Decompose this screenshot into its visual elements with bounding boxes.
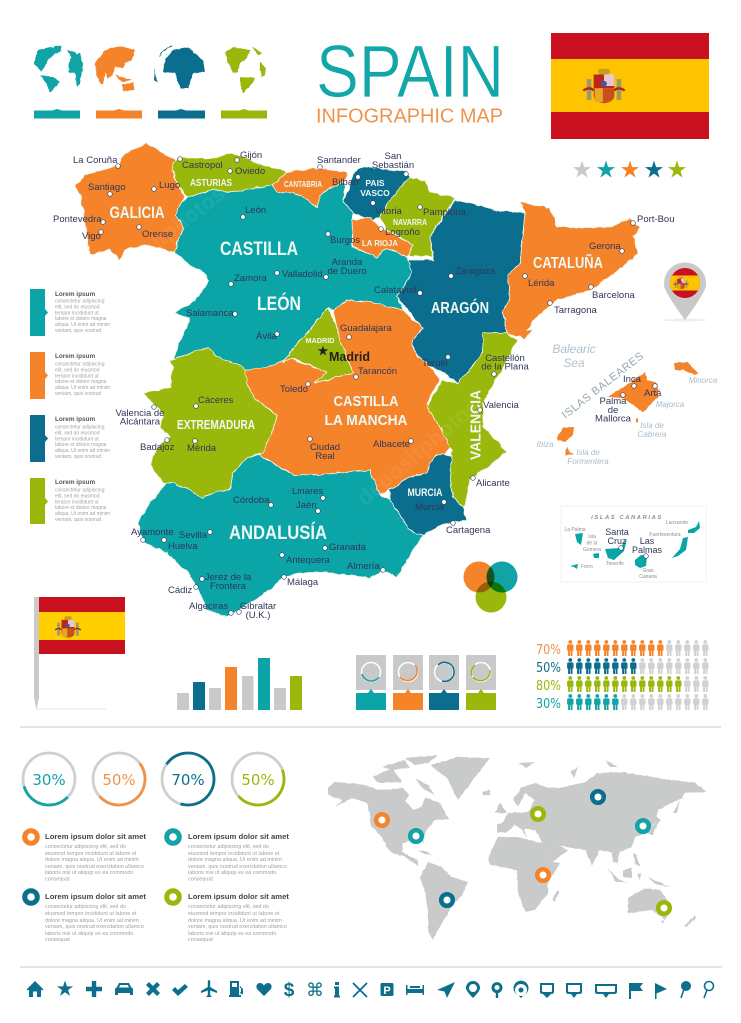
city labels: Jerez de la [205, 572, 252, 583]
island shapes [570, 521, 700, 569]
region: La Rioja [352, 217, 413, 257]
island labels: Artá [644, 388, 662, 399]
region: Asturias [172, 153, 288, 197]
city labels: Albacete [373, 439, 410, 450]
island city labels: Las [640, 536, 655, 546]
legend item teal: elit, sed do eiusmod [55, 304, 100, 310]
icon: pennant [655, 983, 667, 999]
city labels: Vigo [82, 231, 101, 242]
icon: command: ⌘ [306, 980, 324, 1001]
region: Extremadura [143, 347, 277, 498]
watermark on map [95, 181, 484, 511]
bullet block teal: consectetur adipiscing elit, sed do [188, 844, 269, 850]
city labels: Jaén [296, 500, 317, 511]
city labels: Barcelona [592, 290, 635, 301]
people row 70 [567, 640, 708, 656]
city labels: Pamplona [423, 207, 466, 218]
icon: check [172, 984, 188, 996]
bullet block teal: consequat [188, 876, 213, 882]
donut percentage charts [12, 742, 291, 816]
city labels: Santander [317, 155, 361, 166]
region names: GALICIA [110, 203, 164, 222]
city labels: Málaga [287, 577, 319, 588]
legend item teal: tempor incididunt ut [55, 310, 99, 316]
inset heading: ISLAS CANARIAS [591, 515, 663, 521]
percent labels [536, 643, 561, 712]
legend item navy: tempor incididunt ut [55, 436, 99, 442]
region names: MADRID [306, 336, 335, 345]
sea label: Balearic [552, 342, 596, 356]
globes row [34, 45, 267, 118]
legend item green: aliqua. Ut enim ad minim [55, 511, 110, 517]
bullet block orange [25, 831, 146, 882]
panel green [466, 655, 496, 710]
donut 30%: 30% [32, 771, 66, 789]
island labels small: La Palma [564, 527, 586, 533]
bullet block navy: eiusmod tempor incididunt ut labore et [45, 911, 137, 917]
city labels: Toledo [280, 384, 308, 395]
region names: CASTILLA [334, 393, 399, 410]
icon: star [57, 980, 73, 996]
donut 30% [12, 742, 86, 816]
map of Spain regions [75, 143, 640, 617]
icon: cross [146, 982, 160, 996]
icon: pin ring [466, 981, 480, 998]
bullet block green: laboris nisi ut aliquip ex ea commodo [188, 931, 276, 937]
globe underbars [34, 109, 267, 118]
island labels [537, 374, 718, 466]
legend item teal: Lorem ipsum [55, 291, 95, 298]
region names: MURCIA [408, 487, 443, 499]
bullet block orange: laboris nisi ut aliquip ex ea commodo [45, 870, 133, 876]
icon: heart [256, 983, 272, 996]
city labels: Oviedo [235, 166, 265, 177]
globe: asia orange [95, 46, 135, 91]
bullet block green: eiusmod tempor incididunt ut labore et [188, 911, 280, 917]
region names: CASTILLA [220, 239, 298, 260]
legend panels left [30, 289, 110, 524]
island labels small: Canaria [639, 574, 657, 580]
legend item navy: aliqua. Ut enim ad minim [55, 448, 110, 454]
legend item orange: aliqua. Ut enim ad minim [55, 385, 110, 391]
region: Aragon [397, 200, 525, 383]
island city labels: Cruz [607, 536, 627, 546]
legend item orange: veniam, quis nostrud [55, 391, 101, 397]
legend item teal: labore et dolore magna [55, 316, 107, 322]
bullet block green: dolore magna aliqua. Ut enim ad minim [188, 918, 282, 924]
region: Castilla La Mancha [245, 300, 453, 495]
bullet block teal [167, 831, 289, 882]
city labels: Valencia de [116, 408, 164, 419]
donut 50% green [225, 746, 291, 812]
icon: callout filled [540, 983, 554, 998]
legend item green: consectetur adipiscing [55, 488, 105, 494]
inset: canary islands [561, 506, 706, 582]
region: Cantabria [273, 168, 348, 208]
panel teal [356, 655, 386, 710]
region names: ARAGÓN [431, 298, 489, 317]
city labels [53, 150, 674, 621]
city labels: Port-Bou [637, 214, 674, 225]
bullet block orange: consequat [45, 876, 70, 882]
city labels: Valencia [483, 400, 519, 411]
island labels small: Isla [588, 534, 596, 540]
city labels: Linares [292, 486, 323, 497]
region: Galicia [75, 143, 184, 260]
bullet block navy: consectetur adipiscing elit, sed do [45, 904, 126, 910]
legend item teal: veniam, quis nostrud [55, 328, 101, 334]
city labels: Murcia [415, 502, 444, 513]
legend item navy: labore et dolore magna [55, 442, 107, 448]
city labels: Badajoz [140, 442, 175, 453]
icon: plane [201, 980, 217, 997]
city labels: La Coruña [73, 155, 118, 166]
island labels: Inca [623, 374, 642, 385]
city labels: Zamora [234, 273, 267, 284]
legend item orange [30, 352, 110, 399]
region names: PAIS [365, 178, 385, 188]
city labels: Santiago [88, 182, 126, 193]
islands shapes [557, 362, 698, 455]
region names: LA RIOJA [362, 239, 398, 248]
percent labels: 30% [536, 697, 561, 712]
icon: plus [86, 981, 102, 997]
island labels: Formentera [567, 457, 609, 466]
bullet block orange: eiusmod tempor incididunt ut labore et [45, 851, 137, 857]
island labels: Isla de [576, 448, 600, 457]
icon: magnifier pin [704, 982, 714, 998]
island labels: Mallorca [595, 414, 632, 424]
city labels: Castellón [485, 353, 525, 364]
region names: LA MANCHA [324, 412, 408, 429]
people row 50 [567, 658, 708, 674]
bullet block navy: veniam, quis nostrud exercitation ullamco [45, 924, 144, 930]
city labels: León [245, 205, 266, 216]
bullet block navy: Lorem ipsum dolor sit amet [45, 892, 146, 901]
city labels: Burgos [330, 235, 360, 246]
legend item green: tempor incididunt ut [55, 500, 99, 506]
legend item navy: elit, sed do eiusmod [55, 430, 100, 436]
continents [328, 755, 707, 940]
people row 30 [567, 694, 708, 710]
city labels: San [385, 151, 401, 162]
island city labels: Santa [605, 527, 629, 537]
city labels: Calatayud [374, 285, 417, 296]
city labels: Real [315, 451, 335, 462]
city labels: Bilbao [332, 177, 358, 188]
city labels: Lérida [528, 278, 555, 289]
island city labels [605, 527, 663, 555]
icon: pin small [492, 982, 502, 998]
city labels: Mérida [187, 443, 217, 454]
city labels: Frontera [210, 581, 247, 592]
city labels: Ciudad [310, 442, 340, 453]
city labels: Cádiz [168, 585, 193, 596]
region names: LEÓN [257, 293, 301, 315]
globe: north america green [225, 47, 266, 93]
region: Pais Vasco [343, 167, 410, 220]
island labels: Cabrera [638, 430, 667, 439]
panel orange [393, 655, 423, 710]
legend item teal: consectetur adipiscing [55, 298, 105, 304]
legend item green [30, 478, 110, 524]
sea label: Sea [563, 356, 585, 370]
legend item orange: labore et dolore magna [55, 379, 107, 385]
icon: flag [629, 983, 643, 999]
island labels: Palma [600, 396, 627, 407]
city labels: Gerona [589, 241, 621, 252]
donut 50% green: 50% [241, 771, 275, 789]
icon: fork and knife [353, 983, 367, 997]
icon: balloon pin [681, 981, 691, 998]
city labels: Algeciras [189, 601, 228, 612]
city labels: Vitoria [375, 206, 402, 217]
city labels: Cáceres [198, 395, 234, 406]
venn diagram [464, 562, 518, 612]
watermark on map: depositphotos [95, 181, 230, 294]
city labels: Castropol [182, 160, 223, 171]
legend item orange: tempor incididunt ut [55, 374, 99, 380]
island city dots [621, 384, 657, 397]
city labels: Gibraltar [240, 601, 276, 612]
globe: americas teal [34, 45, 83, 93]
city labels: Córdoba [233, 495, 270, 506]
icon: fuel pump [229, 981, 243, 997]
icon: dollar: $ [284, 980, 295, 1001]
bullet block navy: laboris nisi ut aliquip ex ea commodo [45, 931, 133, 937]
bullet block green: Lorem ipsum dolor sit amet [188, 892, 289, 901]
legend item teal [30, 289, 110, 336]
donut 50%: 50% [102, 771, 136, 789]
bullet block teal: veniam, quis nostrud exercitation ullamco [188, 864, 287, 870]
island city labels: Palmas [632, 545, 663, 555]
island labels small: Gran [642, 568, 654, 574]
region: Cataluna [503, 202, 640, 339]
legend item orange: elit, sed do eiusmod [55, 368, 100, 374]
region: Navarra [380, 177, 455, 257]
capital: Madrid: Madrid [329, 350, 370, 364]
bar chart [177, 658, 302, 710]
donut 70%: 70% [171, 771, 205, 789]
globe: africa navy [154, 46, 205, 88]
city labels: Sevilla [179, 530, 208, 541]
island labels small: Lanzarote [666, 520, 688, 526]
region names: CANTABRIA [284, 179, 322, 189]
region names: VALENCIA [468, 390, 484, 460]
city labels: Aranda [332, 257, 363, 268]
bullet block orange: dolore magna aliqua. Ut enim ad minim [45, 857, 139, 863]
city labels: (U.K.) [246, 610, 270, 621]
islands heading: ISLAS BALEARES [560, 350, 647, 421]
city labels: Zaragoza [455, 266, 496, 277]
pictogram percentages [536, 640, 708, 712]
bullet block green: veniam, quis nostrud exercitation ullamco [188, 924, 287, 930]
legend item teal: aliqua. Ut enim ad minim [55, 322, 110, 328]
watermark on map: depositphotos [352, 394, 484, 511]
region: Valencia [427, 333, 517, 507]
city labels: Tarragona [554, 305, 597, 316]
bullet block teal: Lorem ipsum dolor sit amet [188, 832, 289, 841]
city labels: Pontevedra [53, 214, 102, 225]
bullet block orange: consectetur adipiscing elit, sed do [45, 844, 126, 850]
region: Andalucia [138, 455, 423, 617]
legend item navy [30, 415, 110, 462]
icon row [26, 980, 714, 1001]
legend item navy: Lorem ipsum [55, 416, 95, 423]
legend item navy: veniam, quis nostrud [55, 454, 101, 460]
city labels: Gijón [240, 150, 262, 161]
flag of Spain, large [551, 33, 709, 139]
icon: parking: P [383, 985, 391, 997]
icon: target pin [514, 981, 528, 998]
city labels: Antequera [286, 555, 331, 566]
icon: home [26, 981, 44, 997]
island labels small: Fuerteventura [649, 532, 681, 538]
capital: Madrid [318, 346, 370, 364]
city labels: Ávila [256, 331, 277, 342]
legend item orange: Lorem ipsum [55, 353, 95, 360]
bullet block green [167, 891, 289, 943]
rating stars [573, 160, 686, 178]
island labels: Minorca [689, 376, 718, 385]
icon: bed [406, 985, 424, 995]
bullet block teal: eiusmod tempor incididunt ut labore et [188, 851, 280, 857]
island labels small: Tenerife [606, 561, 624, 567]
region: Murcia [390, 453, 467, 535]
city labels: Teruel [422, 358, 448, 369]
region names: EXTREMADURA [177, 418, 255, 432]
small ring panels [356, 655, 496, 710]
city labels: Tarancón [358, 366, 397, 377]
balearic islands [537, 342, 718, 466]
icon: car [115, 983, 133, 995]
bullet block navy: dolore magna aliqua. Ut enim ad minim [45, 918, 139, 924]
bullet block orange: Lorem ipsum dolor sit amet [45, 832, 146, 841]
island labels small: Ferro [581, 564, 593, 570]
city dots [99, 157, 635, 615]
region: Madrid [283, 308, 353, 383]
icon: info [334, 982, 340, 998]
city labels: Almería [347, 561, 380, 572]
icon: callout wide [595, 984, 617, 998]
bullet block green: consequat [188, 937, 213, 943]
bullet block orange: veniam, quis nostrud exercitation ullamco [45, 864, 144, 870]
city labels: Alicante [476, 478, 510, 489]
city labels: Lugo [159, 180, 180, 191]
people row 80 [567, 676, 708, 692]
region names: CATALUÑA [533, 252, 603, 272]
city labels: Huelva [168, 541, 198, 552]
map pins [376, 791, 670, 914]
percent labels: 70% [536, 643, 561, 658]
city labels: Guadalajara [340, 323, 392, 334]
sea label [552, 342, 596, 370]
bullet block navy: consequat [45, 937, 70, 943]
legend item green: Lorem ipsum [55, 479, 95, 486]
region names: VASCO [360, 188, 390, 198]
legend item green: veniam, quis nostrud [55, 517, 101, 523]
city labels: Alcántara [120, 416, 161, 428]
city labels: Orense [142, 229, 173, 240]
island dots [619, 546, 648, 558]
city labels: Granada [329, 542, 367, 553]
city labels: Sebastián [372, 160, 414, 171]
city labels: Salamanca [186, 308, 234, 319]
legend item green: elit, sed do eiusmod [55, 494, 100, 500]
city labels: de la Plana [481, 362, 529, 372]
percent labels: 80% [536, 679, 561, 694]
title: SPAIN: SPAIN [316, 30, 504, 113]
city labels: Ayamonte [131, 527, 174, 538]
icon: parking [380, 983, 394, 997]
legend item navy: consectetur adipiscing [55, 424, 105, 430]
island labels: Isla de [640, 421, 664, 430]
region names: ANDALUSÍA [229, 522, 327, 544]
city labels: Valladolid [282, 269, 322, 280]
donut 70% [152, 743, 224, 815]
bullet block teal: dolore magna aliqua. Ut enim ad minim [188, 857, 282, 863]
panel navy [429, 655, 459, 710]
donut 50% [83, 743, 155, 815]
bullet block green: consectetur adipiscing elit, sed do [188, 904, 269, 910]
percent labels: 50% [536, 661, 561, 676]
bullet block navy [25, 891, 146, 943]
bullet block teal: laboris nisi ut aliquip ex ea commodo [188, 870, 276, 876]
island labels: Majorca [656, 400, 685, 409]
city labels: de Duero [327, 266, 367, 277]
subtitle: INFOGRAPHIC MAP: INFOGRAPHIC MAP [316, 106, 503, 128]
region: Castilla y Leon [173, 182, 412, 370]
island labels: Ibiza [537, 440, 554, 449]
region names: ASTURIAS [190, 177, 232, 189]
map pin with flag [663, 262, 707, 322]
legend item green: labore et dolore magna [55, 505, 107, 511]
world map [328, 755, 707, 940]
city labels: Cartagena [446, 525, 491, 536]
icon: callout [566, 983, 582, 998]
region names [110, 177, 603, 544]
legend item orange: consectetur adipiscing [55, 362, 105, 368]
text blocks with bullets [25, 831, 289, 943]
region names: NAVARRA [393, 218, 427, 227]
island labels: de [608, 405, 618, 416]
island labels small [564, 520, 688, 580]
icon: navigation arrow [437, 982, 455, 998]
island labels small: de la [587, 540, 598, 546]
flag on pole [34, 597, 125, 710]
city labels: Logroño [385, 227, 420, 238]
island labels small: Gomera [583, 547, 601, 553]
